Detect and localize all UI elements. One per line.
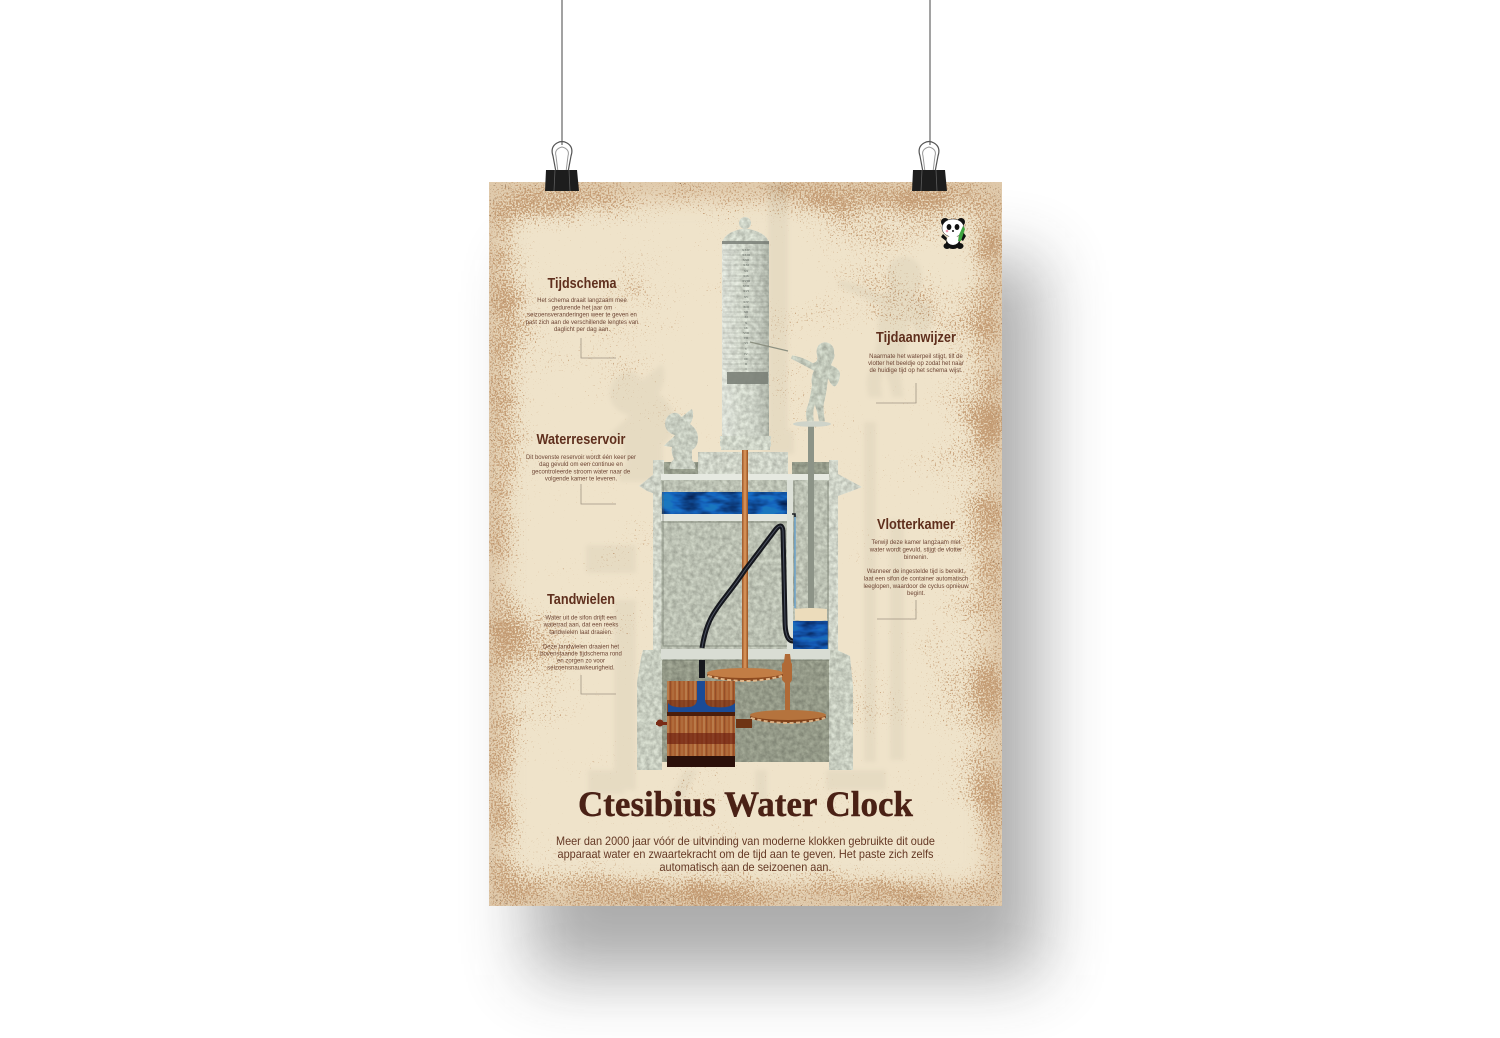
text: Tandwielen description: tandwielen laat draaien. [549,630,613,636]
text: Waterreservoir description: gecontroleerde stroom water naar de [532,470,631,476]
hour numerals: I [745,367,747,371]
heading: Tandwielen: Tandwielen [547,591,615,608]
block: Tijdschema [526,275,638,358]
stand overflow tube [794,515,796,608]
siphon tube [702,526,793,648]
hour numerals: II [745,362,747,366]
text: Tandwielen description: Deze tandwielen draaien het [543,644,619,650]
text: Vlotterkamer description: binnenin. [904,555,929,561]
hour numerals: IX [744,326,748,330]
heading: Vlotterkamer: Vlotterkamer [877,516,955,533]
hour numerals: XV [744,295,749,299]
text: Vlotterkamer description: leeglopen, waardoor de cyclus opnieuw [863,584,969,590]
chamber shelf [661,649,830,659]
column top knob [720,217,771,450]
copper shaft with bulb [782,654,792,716]
intro paragraph: Meer dan 2000 jaar vóór de uitvinding van moderne klokken gebruikte dit oude [556,834,935,848]
reservoir shelf [661,514,787,521]
heading: Tijdschema: Tijdschema [548,275,617,292]
hour numerals: XVIII [742,279,750,283]
float rod [808,425,814,608]
text: Waterreservoir description: dag gevuld om een continue en [539,462,623,468]
text: Tijdaanwijzer description: vlotter het beeldje op zodat het naar [868,361,964,367]
text: Vlotterkamer description: laat een sifon de container automatisch [864,576,968,582]
paper dark edge speckle [489,182,1002,906]
block: Tijdaanwijzer [868,329,964,403]
paper base [489,182,1002,906]
float rod platform [793,421,831,427]
text: Vlotterkamer description: Terwijl deze kamer langzaam met [871,540,961,546]
text: Tijdschema description: daglicht per dag aan. [554,327,610,333]
lower gear [736,710,826,728]
binder clip left [545,142,579,191]
divider wall [787,480,793,650]
block: Vlotterkamer [863,516,969,619]
hour numerals: VIII [743,331,749,335]
clock housing [637,421,862,770]
copper rod [742,450,748,672]
dark band [727,372,768,384]
text: Tandwielen description: bovenstaande tijdschema rond [540,652,622,658]
title: Ctesibius Water Clock [578,784,913,824]
connector [581,338,616,358]
hour numerals: XII [744,310,748,314]
engraved rings [723,250,768,369]
block: Tandwielen [540,591,622,694]
hour numerals: XX [744,269,749,273]
paper edge tint [489,182,1002,906]
hour numerals: IV [744,352,748,356]
heading: Waterreservoir: Waterreservoir [536,431,626,448]
hour numerals: XXII [743,258,749,262]
hour numerals [742,248,751,371]
connector [876,383,916,403]
column scale [720,217,771,450]
hour numerals: XIII [743,305,749,309]
text: Tandwielen description: Water uit de sifon drijft een [545,616,617,622]
text: Waterreservoir description [526,455,636,482]
text: Tandwielen description: waterrad aan, dat een reeks [543,622,618,628]
block: Waterreservoir [526,431,636,504]
water wheel box [656,681,735,767]
intro paragraph: apparaat water en zwaartekracht om de tijd aan te geven. Het paste zich zelfs [558,847,934,861]
text: Vlotterkamer description: water wordt gevuld, stijgt de vlotter [869,548,962,554]
intro paragraph [556,834,935,874]
float [795,608,827,621]
text: Waterreservoir description: volgende kamer te leveren. [545,476,618,482]
panda logo [941,218,966,249]
hour numerals: VI [744,341,748,345]
stone frame [637,452,862,770]
text: Tandwielen description [540,616,622,672]
text: Tandwielen description: seizoensnauwkeurigheid. [547,666,615,672]
paper distressed speckle [489,182,1009,906]
column shading [722,242,769,436]
poster drop shadow [530,260,1040,975]
hour numerals: X [745,321,748,325]
hour numerals: III [744,357,748,361]
ghost background silhouettes [586,182,933,810]
connector [581,484,616,504]
top rail [661,474,829,480]
inner shadow lines [663,481,829,660]
hanging string left [561,0,563,145]
intro paragraph: automatisch aan de seizoenen aan. [660,860,832,874]
hanging string right [929,0,931,145]
text: Vlotterkamer description: Wanneer de ingestelde tijd is bereikt, [867,569,965,575]
upper reservoir water [662,492,787,515]
text: Vlotterkamer description [863,540,969,597]
float chamber water [793,621,828,649]
text: Tijdschema description: past zich aan de verschillende lengtes van [526,320,638,326]
text: Tijdschema description: Het schema draait langzaam mee [537,298,628,304]
hour numerals: XIX [743,274,750,278]
hour numerals: XI [744,315,748,319]
text: Tijdschema description: gedurende het jaar om [552,306,612,312]
seated cherub statue [664,409,698,469]
text: Tijdaanwijzer description: de huidige tijd op het schema wijst. [869,368,963,374]
upper gear [707,668,783,681]
hour numerals: XVI [743,289,749,293]
text: Waterreservoir description: Dit bovenste reservoir wordt één keer per [526,455,636,461]
poster [489,182,1002,906]
text: Tijdaanwijzer description [868,354,964,374]
text: Tijdaanwijzer description: Naarmate het waterpeil stijgt, tilt de [869,354,964,360]
text: Tijdschema description: seizoensveranderingen weer te geven en [527,312,637,318]
heading: Tijdaanwijzer: Tijdaanwijzer [876,329,956,346]
pointer cherub statue [750,342,840,421]
hour numerals: XXIV [742,248,751,252]
hour numerals: XIV [743,300,750,304]
hour numerals: XXI [743,263,749,267]
text: Tijdschema description [526,298,638,333]
hour numerals: VII [744,336,748,340]
connector [877,600,916,619]
hour numerals: V [745,347,748,351]
text: Vlotterkamer description: begint. [907,591,925,597]
hour numerals: XVII [743,284,749,288]
connector [581,675,616,694]
text: Tandwielen description: en zorgen zo voor [557,658,605,664]
siphon outlet [699,660,705,678]
binder clip right [912,142,947,191]
hour numerals: XXIII [742,253,750,257]
